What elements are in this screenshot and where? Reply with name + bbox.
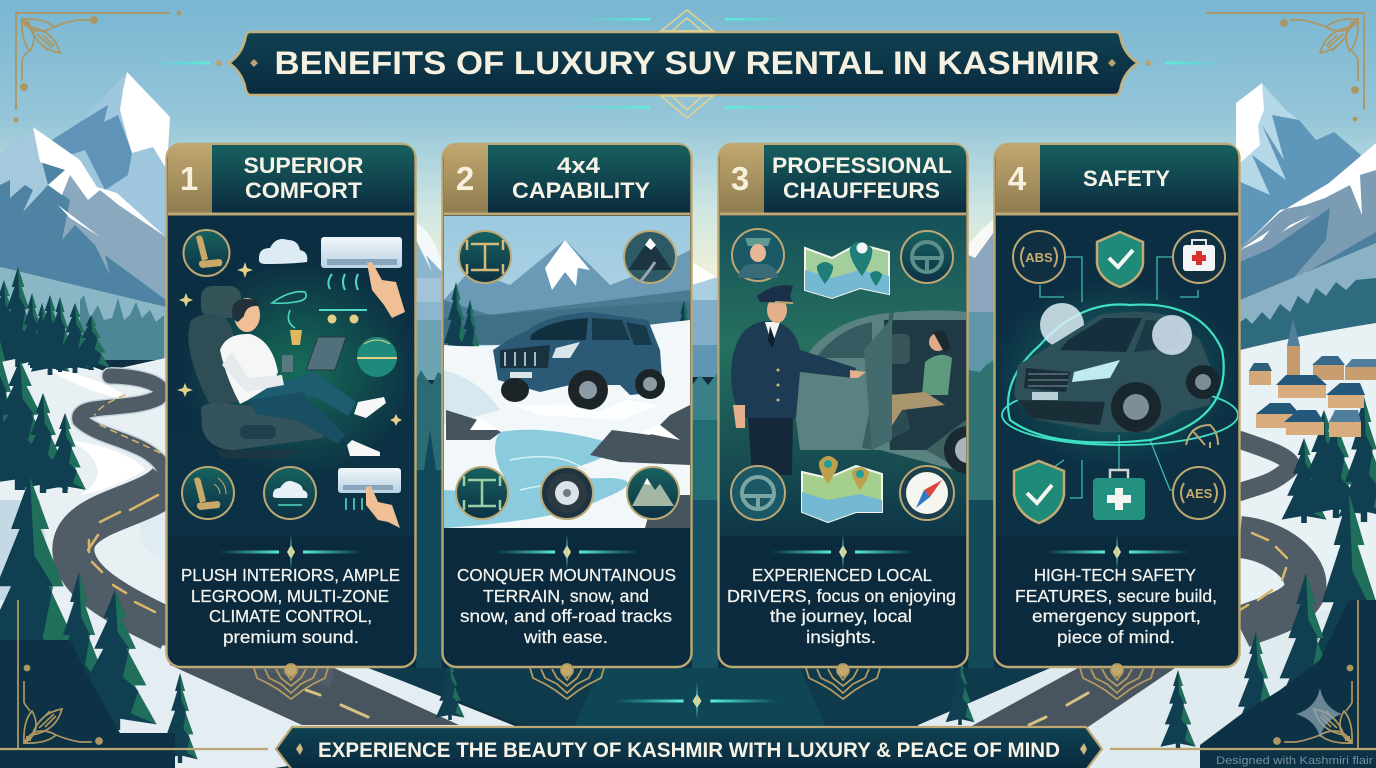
- centre dark valley: [368, 668, 1050, 768]
- number badge 1: [168, 145, 212, 213]
- bottom shield: [1014, 461, 1064, 523]
- pine trees right and lower dark corner: [436, 397, 1376, 768]
- title decorations: [150, 10, 1225, 118]
- bottom air conditioner: [338, 468, 401, 510]
- right front mountain: [1240, 143, 1376, 305]
- small gold warning icon: [1186, 425, 1218, 448]
- illustration: protected SUV: [996, 230, 1238, 524]
- mountains: [444, 240, 690, 345]
- corner ornament: bottom right: [1210, 600, 1358, 749]
- chauffeur: [731, 285, 866, 475]
- gold mandala ornaments below panels: [254, 664, 1154, 699]
- heading: SAFETY: [1083, 166, 1170, 191]
- air waves: [328, 274, 358, 290]
- description: CLIMATE CONTROL,: [209, 606, 372, 626]
- illustration: chauffeur and car: [720, 216, 992, 536]
- rocks: [446, 405, 690, 528]
- snow slope: [444, 320, 690, 528]
- snow ground: [0, 332, 170, 700]
- cloud: [259, 239, 307, 264]
- corner ornament: top left: [14, 12, 180, 122]
- description: snow, and off-road tracks: [460, 606, 672, 626]
- light bar and dots: [319, 309, 367, 324]
- bottom map: [802, 456, 882, 522]
- heading: [244, 153, 364, 203]
- heading: [512, 153, 650, 203]
- description: HIGH-TECH SAFETY: [1034, 565, 1196, 585]
- ABS icon: ABS: [1025, 250, 1053, 265]
- heading: COMFORT: [245, 178, 363, 203]
- title banner: [229, 32, 1138, 95]
- heading: 4x4: [557, 153, 601, 178]
- footer text: EXPERIENCE THE BEAUTY OF KASHMIR WITH LUXURY & PEACE OF MIND: [318, 739, 1060, 762]
- description: piece of mind.: [1057, 627, 1175, 647]
- number badge 3: [720, 145, 764, 213]
- village: [1249, 318, 1376, 437]
- ABS icon: [1013, 231, 1065, 283]
- bottom seat icon: [182, 467, 234, 519]
- pine trees left: [0, 267, 198, 768]
- river: [444, 430, 628, 528]
- air conditioner: [321, 237, 402, 268]
- description: PLUSH INTERIORS, AMPLE: [181, 565, 400, 585]
- description: FEATURES, secure build,: [1015, 586, 1217, 606]
- sparkles: [177, 262, 402, 426]
- footer banner: [0, 727, 1376, 768]
- divider: [1045, 534, 1189, 570]
- corner ornament: bottom left: [18, 600, 170, 749]
- airbag right: [1152, 315, 1192, 355]
- steering icon: [901, 231, 953, 283]
- glowing sphere: [357, 337, 397, 377]
- AES icon: AES: [1186, 486, 1213, 501]
- right valley band and forest: [1240, 243, 1376, 360]
- number badge 2: 2: [456, 160, 474, 197]
- snow area below cards: [0, 600, 525, 768]
- description: DRIVERS, focus on enjoying: [727, 586, 956, 606]
- seat icon: [184, 230, 230, 276]
- left front mountain: [0, 127, 166, 307]
- description: LEGROOM, MULTI-ZONE: [191, 586, 389, 606]
- number badge 2: [444, 145, 488, 213]
- bottom cloud icon: [264, 467, 316, 519]
- right back mountain: [1236, 83, 1361, 260]
- first aid icon: [1173, 231, 1225, 283]
- description: [457, 565, 676, 647]
- centre glow divider: [616, 683, 778, 719]
- heading: CAPABILITY: [512, 178, 650, 203]
- glow ring: [1008, 304, 1224, 442]
- illustration: SUV in snow: [440, 216, 700, 528]
- heading: SUPERIOR: [244, 153, 364, 178]
- seat: [188, 286, 325, 458]
- panel 2: 4x4 capability: [440, 144, 700, 667]
- heading: [772, 153, 952, 203]
- aroma wisp: [272, 292, 306, 328]
- gap 1 scenery: [416, 222, 442, 668]
- heading: CHAUFFEURS: [783, 178, 940, 203]
- description: TERRAIN, snow, and: [483, 586, 649, 606]
- connector lines: [1040, 257, 1198, 498]
- left back mountain: [52, 72, 170, 330]
- description: EXPERIENCED LOCAL: [752, 565, 932, 585]
- left valley band and pale forest: [0, 267, 166, 360]
- number badge 4: [996, 145, 1040, 213]
- panel 1: superior comfort: [166, 144, 420, 667]
- divider: [771, 534, 915, 570]
- SUV: [493, 312, 665, 420]
- gap 2 scenery: [692, 262, 718, 668]
- signature: Designed with Kashmiri flair: [1216, 755, 1373, 767]
- panel 3: professional chauffeurs: [718, 144, 992, 667]
- shield: [1097, 232, 1143, 287]
- sparkle watermark: [1296, 688, 1342, 738]
- divider: [219, 534, 363, 570]
- description: [727, 565, 956, 647]
- AES icon: [1173, 467, 1225, 519]
- gap 3 scenery: [968, 220, 994, 668]
- background sky: [0, 0, 1376, 340]
- passenger: [892, 330, 952, 426]
- number badge 4: 4: [1008, 160, 1027, 197]
- hand: [367, 262, 405, 318]
- illustration: relaxed passenger: [177, 229, 414, 528]
- heading: PROFESSIONAL: [772, 153, 952, 178]
- right winding road: [970, 440, 1305, 727]
- SUV: [1014, 312, 1220, 432]
- description: insights.: [806, 627, 876, 647]
- compass: [900, 466, 954, 520]
- left winding road: [73, 376, 459, 725]
- bottom hand: [366, 486, 400, 528]
- description: [1015, 565, 1217, 647]
- divider: [495, 534, 639, 570]
- circle icons: [459, 231, 511, 283]
- description: with ease.: [523, 627, 608, 647]
- panel 4: safety: [990, 144, 1240, 667]
- description: emergency support,: [1032, 606, 1201, 626]
- description: the journey, local: [770, 606, 912, 626]
- airbag left: [1040, 303, 1084, 347]
- number badge 1: 1: [180, 160, 198, 197]
- description: premium sound.: [223, 627, 359, 647]
- bottom steering icon: [731, 466, 785, 520]
- car with open door: [796, 310, 966, 474]
- tablet: [306, 337, 346, 370]
- bottom first aid kit: [1093, 470, 1145, 520]
- map with pins: [805, 242, 889, 298]
- description: CONQUER MOUNTAINOUS: [457, 565, 676, 585]
- title text: BENEFITS OF LUXURY SUV RENTAL IN KASHMIR: [274, 45, 1100, 81]
- driver icon: [732, 229, 784, 281]
- passenger: [220, 298, 386, 456]
- number badge 3: 3: [731, 160, 749, 197]
- description: [181, 565, 400, 647]
- corner ornament: top right: [1206, 13, 1364, 120]
